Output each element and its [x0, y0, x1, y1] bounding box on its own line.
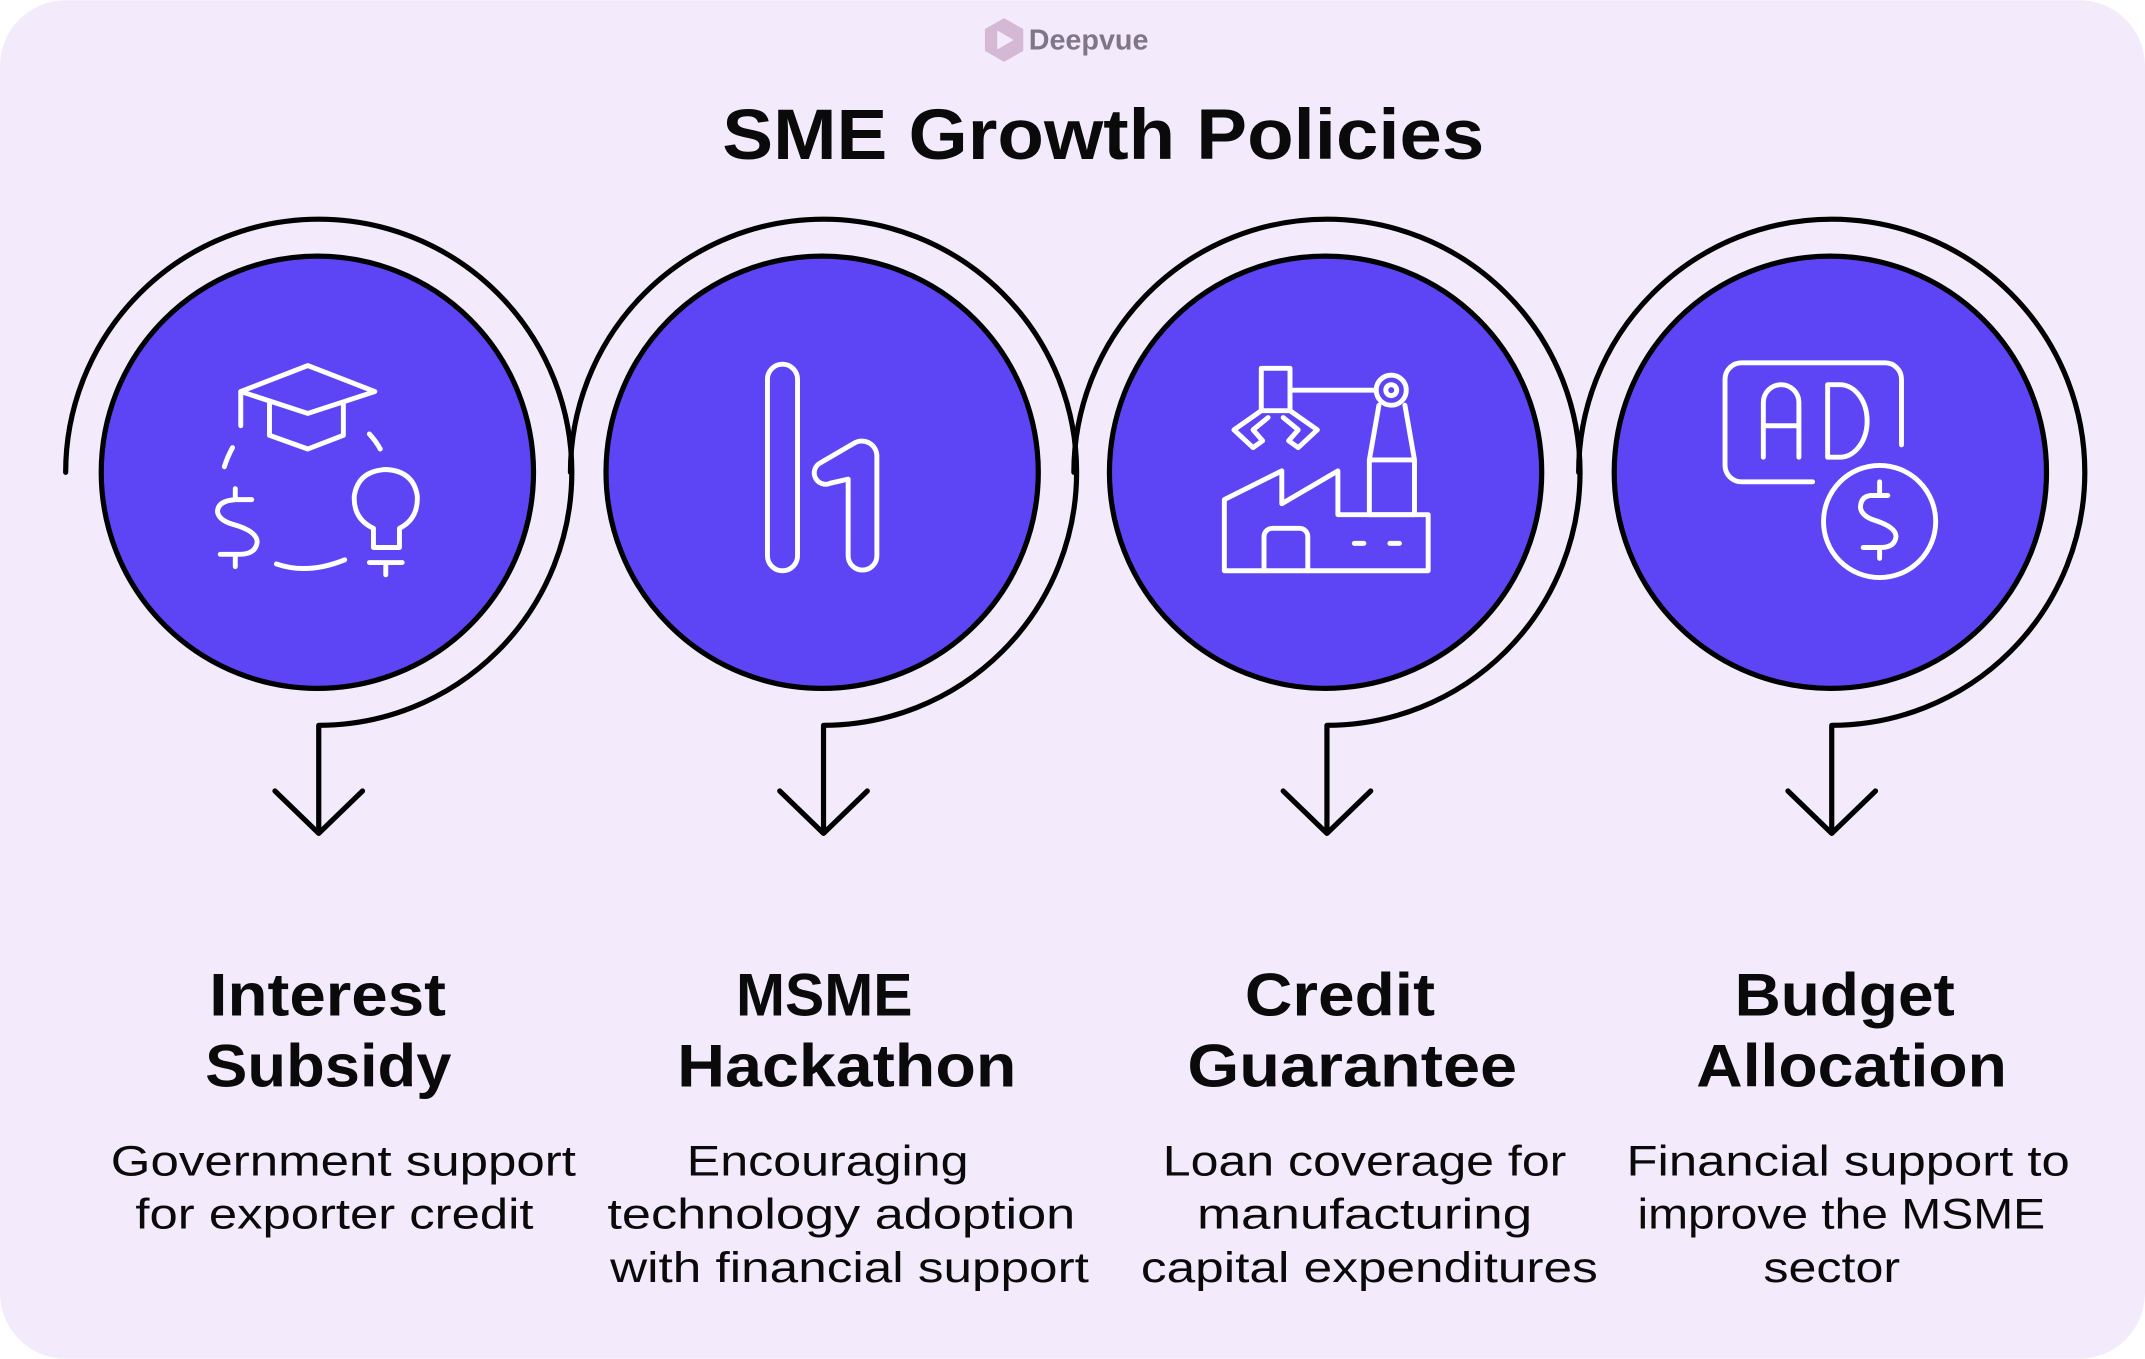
- description 3: [1141, 1137, 1598, 1291]
- description 4: sector: [1763, 1244, 1900, 1291]
- heading 1: Interest: [209, 961, 446, 1028]
- heading 4: Allocation: [1696, 1032, 2007, 1099]
- circle 2: [606, 256, 1038, 688]
- description 4: [1627, 1137, 2070, 1291]
- description 4: improve the MSME: [1637, 1191, 2045, 1238]
- logo: Deepvue: [1029, 25, 1148, 57]
- circle 4: [1614, 256, 2047, 688]
- heading 3: Credit: [1245, 961, 1435, 1028]
- arc arrow 2: [570, 219, 1077, 833]
- step 4: Budget Allocation: [1579, 219, 2085, 833]
- icon: AD and coin: [1725, 363, 1936, 578]
- icon: factory robot arm: [1224, 368, 1428, 571]
- description 1: [111, 1137, 576, 1238]
- logo: [985, 18, 1148, 62]
- icon: cap, dollar, bulb: [218, 366, 417, 575]
- heading 2: [677, 961, 1016, 1099]
- description 3: Loan coverage for: [1163, 1137, 1566, 1184]
- description 2: Encouraging: [687, 1137, 969, 1184]
- description 3: capital expenditures: [1141, 1244, 1598, 1291]
- step 2: MSME Hackathon: [570, 219, 1077, 833]
- heading 3: [1187, 961, 1517, 1099]
- description 3: manufacturing: [1197, 1191, 1532, 1238]
- heading 3: Guarantee: [1187, 1032, 1517, 1099]
- description 4: Financial support to: [1627, 1137, 2070, 1184]
- description 2: with financial support: [609, 1244, 1089, 1291]
- description 2: technology adoption: [607, 1191, 1075, 1238]
- circle 3: [1109, 256, 1542, 688]
- heading 1: [205, 961, 452, 1099]
- description 2: [607, 1137, 1089, 1291]
- description 1: Government support: [111, 1137, 576, 1184]
- heading 2: MSME: [736, 961, 912, 1028]
- heading 2: Hackathon: [677, 1032, 1016, 1099]
- description 1: for exporter credit: [135, 1191, 534, 1238]
- heading 4: [1696, 961, 2007, 1099]
- arc arrow 3: [1074, 219, 1580, 833]
- arc arrow 1: [66, 219, 572, 833]
- icon: h1: [767, 364, 877, 571]
- step 1: Interest Subsidy: [66, 219, 572, 833]
- heading 4: Budget: [1735, 961, 1955, 1028]
- heading 1: Subsidy: [205, 1032, 452, 1099]
- arc arrow 4: [1579, 219, 2085, 833]
- title: SME Growth Policies: [722, 96, 1484, 175]
- step 3: Credit Guarantee: [1074, 219, 1580, 833]
- circle 1: [101, 256, 534, 688]
